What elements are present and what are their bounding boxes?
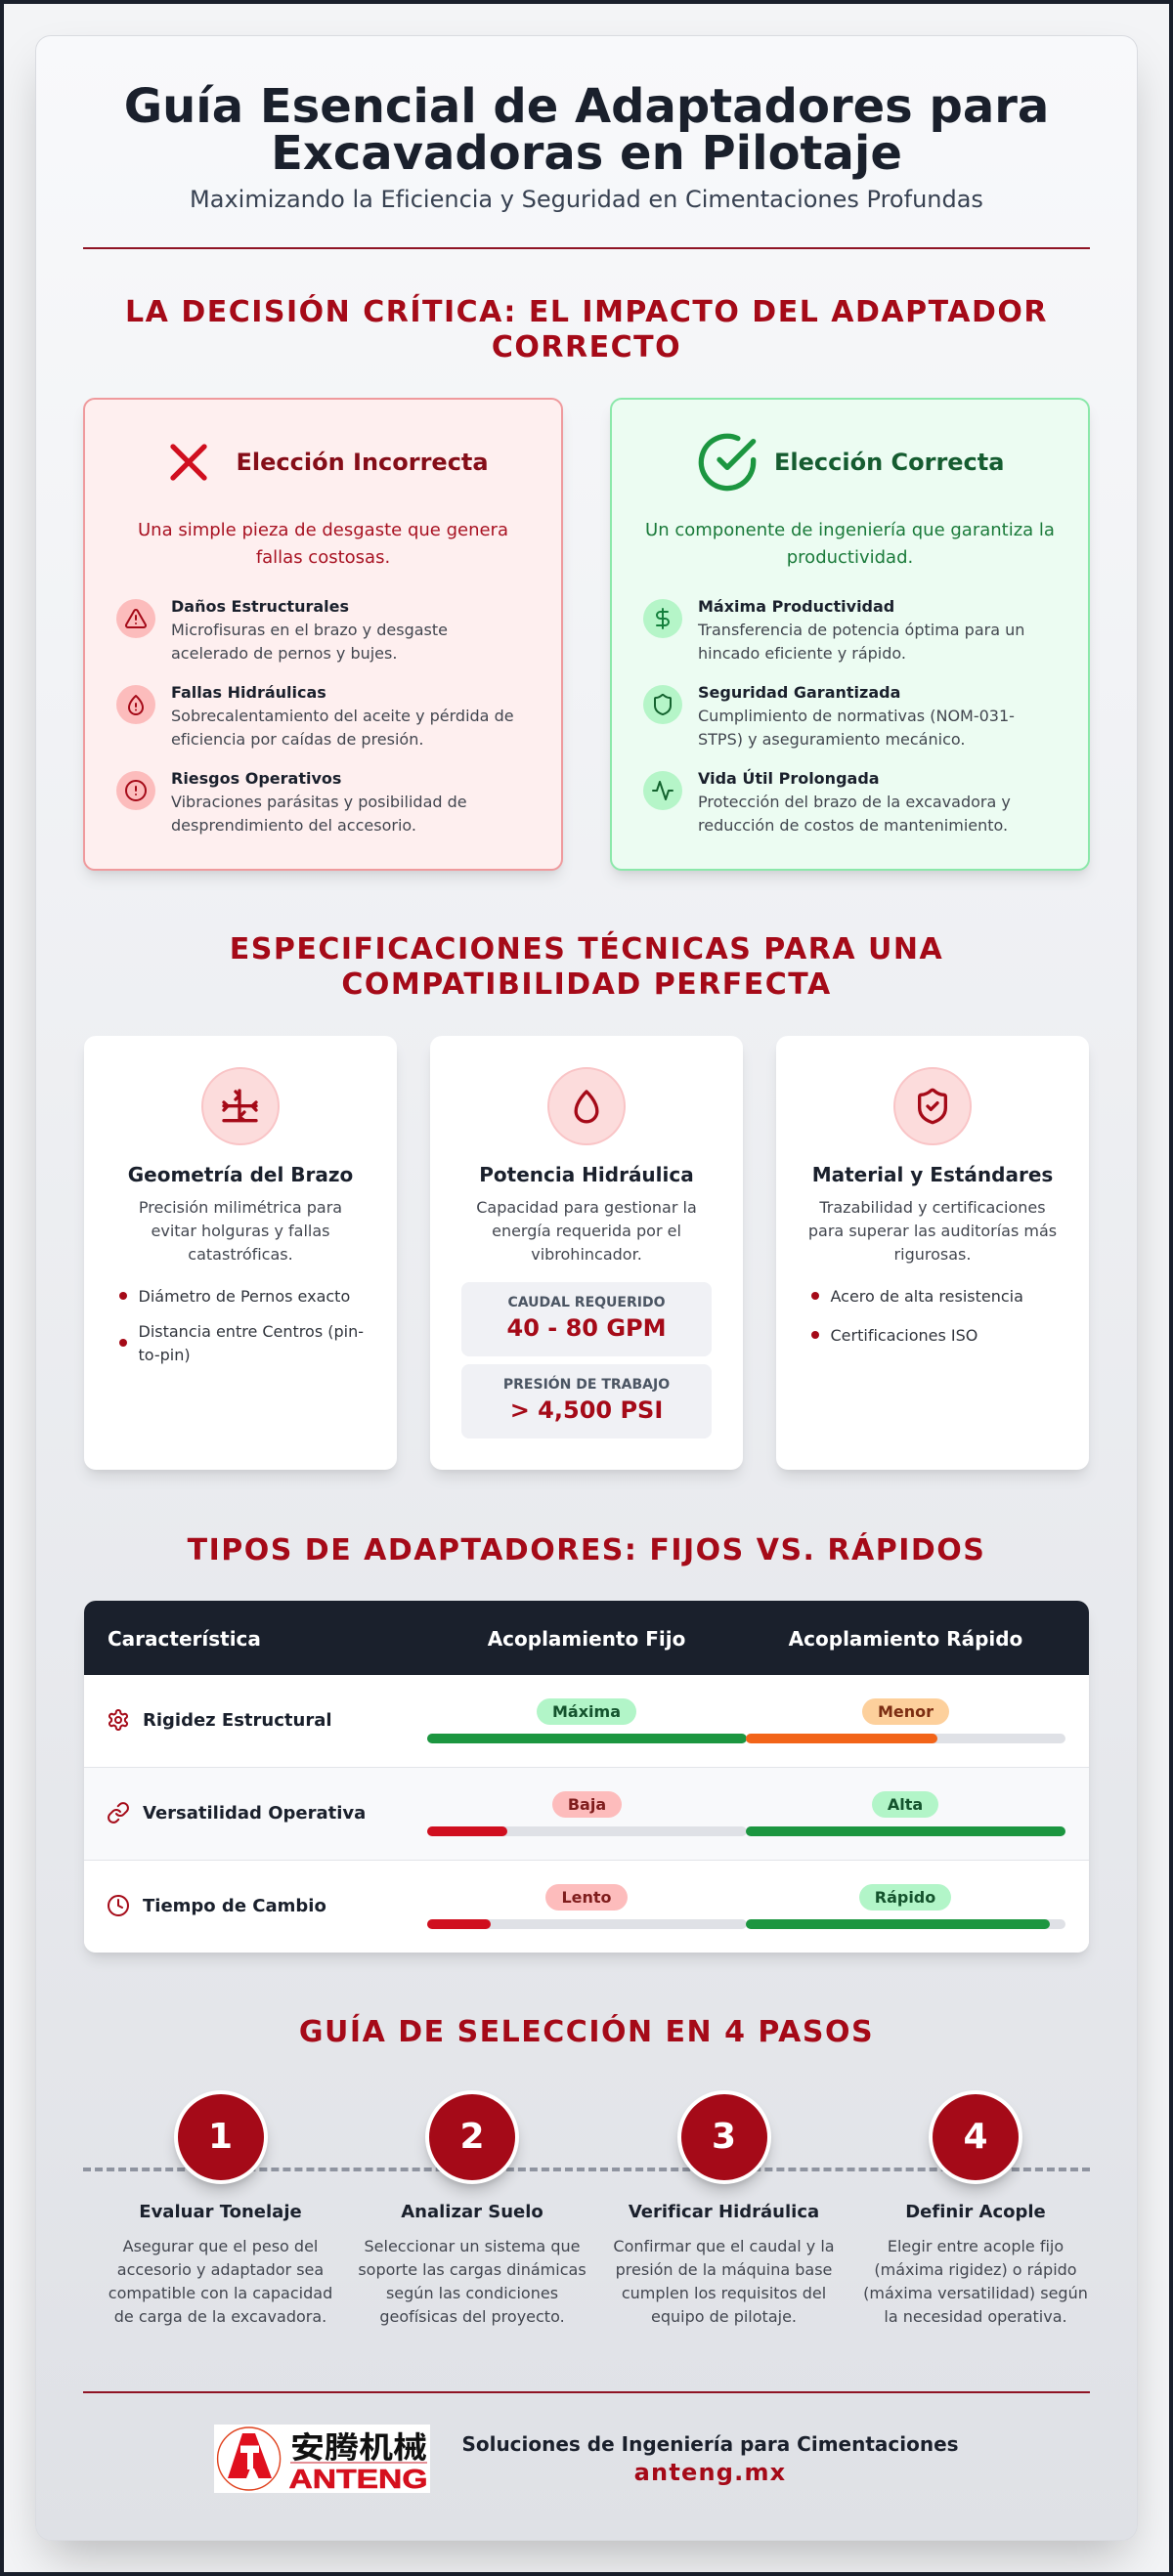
step number: 3	[712, 2117, 736, 2157]
step text	[613, 2237, 835, 2326]
column: acoplamiento fijo: Acoplamiento Fijo	[488, 1627, 685, 1651]
logo: anteng	[214, 2425, 430, 2493]
bullet	[811, 1331, 819, 1339]
step title: Analizar Suelo	[401, 2202, 543, 2222]
icon: check circle	[698, 434, 757, 491]
row: tiempo de cambio	[84, 1861, 1089, 1953]
bar: rápido 60%	[746, 1734, 1065, 1743]
step text: presión de la máquina base	[616, 2260, 832, 2279]
badge: baja	[552, 1791, 622, 1818]
step number	[676, 2090, 770, 2184]
bullet	[119, 1339, 127, 1347]
badge: alta	[872, 1791, 938, 1818]
panel: elección incorrecta	[83, 398, 563, 871]
step 3	[613, 2090, 835, 2326]
step text: (máxima rigidez) o rápido	[874, 2260, 1077, 2279]
bullet text	[139, 1322, 364, 1364]
badge: baja: Baja	[568, 1795, 606, 1814]
panel heading: Elección Correcta	[774, 449, 1004, 476]
stat: caudal: 40 - 80 GPM	[506, 1314, 667, 1342]
card title: Potencia Hidráulica	[479, 1163, 694, 1186]
card text: vibrohincador.	[531, 1245, 642, 1264]
item text: desprendimiento del accesorio.	[171, 816, 416, 835]
card text: Capacidad para gestionar la	[476, 1198, 697, 1217]
item text	[698, 768, 1011, 835]
step text	[109, 2237, 332, 2326]
step text: Elegir entre acople fijo	[888, 2237, 1064, 2255]
bullet text: Diámetro de Pernos exacto	[139, 1287, 350, 1306]
card text: Precisión milimétrica para	[139, 1198, 342, 1217]
column: característica: Característica	[108, 1627, 261, 1651]
step text: cumplen los requisitos del	[622, 2284, 826, 2302]
stat: caudal: CAUDAL REQUERIDO	[508, 1295, 665, 1310]
row label: Rigidez Estructural	[143, 1710, 332, 1731]
step number	[174, 2090, 268, 2184]
step text: compatible con la capacidad	[109, 2284, 332, 2302]
card text: energía requerida por el	[492, 1222, 681, 1240]
item text	[698, 597, 1024, 663]
item text: Sobrecalentamiento del aceite y pérdida de	[171, 707, 514, 725]
lead text: fallas costosas.	[256, 547, 390, 568]
item text: hincado eficiente y rápido.	[698, 644, 906, 663]
step text: Asegurar que el peso del	[123, 2237, 318, 2255]
step text: de carga de la excavadora.	[114, 2307, 326, 2326]
step text	[863, 2237, 1088, 2326]
step number	[425, 2090, 519, 2184]
badge: menor: Menor	[878, 1702, 934, 1721]
heading: especificaciones: ESPECIFICACIONES TÉCNICAS PARA UNA	[230, 932, 943, 966]
step text: (máxima versatilidad) según	[863, 2284, 1088, 2302]
bar: rápido 95%	[746, 1919, 1065, 1929]
step 4	[863, 2090, 1088, 2326]
item text	[698, 683, 1015, 749]
item text: eficiencia por caídas de presión.	[171, 730, 423, 749]
badge: alta: Alta	[888, 1795, 923, 1814]
heading: especificaciones	[230, 930, 943, 1002]
card text	[808, 1198, 1057, 1264]
step text: según las condiciones	[386, 2284, 558, 2302]
step number: 1	[208, 2117, 233, 2157]
card text: catastróficas.	[188, 1245, 293, 1264]
bullet text: to-pin)	[139, 1346, 191, 1364]
row: versatilidad operativa	[84, 1768, 1089, 1861]
step text: la necesidad operativa.	[884, 2307, 1067, 2326]
footer tagline: Soluciones de Ingeniería para Cimentaciones	[461, 2432, 959, 2456]
step title: Evaluar Tonelaje	[139, 2202, 302, 2222]
icon: arm geometry	[201, 1067, 280, 1145]
step text: accesorio y adaptador sea	[117, 2260, 324, 2279]
icon: shield	[643, 685, 682, 724]
panel heading: Elección Incorrecta	[237, 449, 489, 476]
comparison table	[84, 1601, 1089, 1953]
stat: presión: PRESIÓN DE TRABAJO	[503, 1377, 670, 1393]
item text: Vida Útil Prolongada	[698, 769, 880, 788]
step 2	[358, 2090, 586, 2326]
step number: 4	[963, 2117, 988, 2157]
badge: menor	[862, 1698, 949, 1725]
bar: rápido 100%	[746, 1826, 1065, 1836]
panel: elección correcta	[610, 398, 1090, 871]
stat: caudal	[461, 1282, 712, 1356]
bullet	[119, 1292, 127, 1300]
item text: acelerado de pernos y bujes.	[171, 644, 397, 663]
bullet	[811, 1292, 819, 1300]
step text: geofísicas del proyecto.	[379, 2307, 565, 2326]
title	[124, 79, 1049, 181]
column: acoplamiento rápido: Acoplamiento Rápido	[789, 1627, 1022, 1651]
icon: x	[170, 444, 207, 481]
item text: Riesgos Operativos	[171, 769, 341, 788]
stat: presión: > 4,500 PSI	[510, 1396, 663, 1424]
item: máxima productividad	[643, 597, 1024, 663]
step text: equipo de pilotaje.	[651, 2307, 797, 2326]
card text	[139, 1198, 342, 1264]
icon: warning	[116, 599, 155, 638]
lead text: productividad.	[787, 547, 913, 568]
card text: para superar las auditorías más	[808, 1222, 1057, 1240]
step text: soporte las cargas dinámicas	[358, 2260, 586, 2279]
item text: Vibraciones parásitas y posibilidad de	[171, 793, 467, 811]
step 1	[109, 2090, 332, 2326]
bar: fijo 25%	[427, 1826, 747, 1836]
lead text: Un componente de ingeniería que garantiza la	[645, 520, 1055, 540]
title: Guía Esencial de Adaptadores para	[124, 79, 1049, 134]
step number: 2	[459, 2117, 485, 2157]
step text: Confirmar que el caudal y la	[613, 2237, 835, 2255]
card text: Trazabilidad y certificaciones	[819, 1198, 1046, 1217]
item text: Fallas Hidráulicas	[171, 683, 326, 702]
item: daños estructurales	[116, 597, 448, 663]
badge: lento	[545, 1884, 628, 1911]
row label: Tiempo de Cambio	[143, 1896, 326, 1916]
row label: Versatilidad Operativa	[143, 1803, 366, 1824]
badge: rápido: Rápido	[875, 1888, 935, 1907]
heading: decisión crítica: CORRECTO	[492, 330, 681, 365]
item text: Daños Estructurales	[171, 597, 349, 616]
subtitle: Maximizando la Eficiencia y Seguridad en Cimentaciones Profundas	[190, 186, 983, 213]
panel: geometría del brazo	[84, 1036, 397, 1470]
heading: tipos de adaptadores: TIPOS DE ADAPTADORES: FIJOS VS. RÁPIDOS	[188, 1533, 985, 1567]
badge: rápido	[859, 1884, 951, 1911]
icon: shield check	[893, 1067, 972, 1145]
item text: Microfisuras en el brazo y desgaste	[171, 621, 448, 639]
item text	[171, 597, 448, 663]
item text: STPS) y aseguramiento mecánico.	[698, 730, 965, 749]
step title: Definir Acople	[905, 2202, 1046, 2222]
card text: rigurosas.	[894, 1245, 971, 1264]
heading: decisión crítica: LA DECISIÓN CRÍTICA: EL IMPACTO DEL ADAPTADOR	[125, 295, 1048, 329]
icon: drop	[547, 1067, 626, 1145]
card text	[476, 1198, 697, 1264]
item text: reducción de costos de mantenimiento.	[698, 816, 1008, 835]
row: rigidez estructural	[84, 1675, 1089, 1768]
card text: evitar holguras y fallas	[151, 1222, 330, 1240]
item text: Protección del brazo de la excavadora y	[698, 793, 1011, 811]
step title: Verificar Hidráulica	[629, 2202, 819, 2222]
card title: Geometría del Brazo	[128, 1163, 353, 1186]
step number	[929, 2090, 1022, 2184]
item: fallas hidráulicas	[116, 683, 514, 749]
step text: Seleccionar un sistema que	[365, 2237, 580, 2255]
item text	[171, 683, 514, 749]
panel: potencia hidráulica	[430, 1036, 743, 1470]
bullet text: Distancia entre Centros (pin-	[139, 1322, 364, 1341]
title: Excavadoras en Pilotaje	[271, 126, 902, 181]
badge: lento: Lento	[561, 1888, 612, 1907]
card title: Material y Estándares	[812, 1163, 1053, 1186]
badge: máxima	[537, 1698, 636, 1725]
bar: fijo 100%	[427, 1734, 747, 1743]
icon: pulse	[643, 771, 682, 810]
item text: Máxima Productividad	[698, 597, 894, 616]
lead text	[138, 520, 508, 568]
lead text: Una simple pieza de desgaste que genera	[138, 520, 508, 540]
item: riesgos operativos	[116, 769, 467, 835]
icon: oil drop alert	[116, 685, 155, 724]
heading: especificaciones: COMPATIBILIDAD PERFECTA	[341, 967, 832, 1002]
item text: Cumplimiento de normativas (NOM-031-	[698, 707, 1015, 725]
bar: fijo 20%	[427, 1919, 747, 1929]
icon: dollar	[643, 599, 682, 638]
heading: decisión crítica	[125, 293, 1048, 365]
icon: alert circle	[116, 771, 155, 810]
item text: Seguridad Garantizada	[698, 683, 900, 702]
footer url: anteng.mx	[634, 2459, 786, 2486]
bullet text: Acero de alta resistencia	[831, 1287, 1023, 1306]
bullet text: Certificaciones ISO	[831, 1326, 978, 1345]
table header	[84, 1601, 1089, 1675]
item text: Transferencia de potencia óptima para un	[698, 621, 1024, 639]
badge: máxima: Máxima	[552, 1702, 621, 1721]
panel: material y estándares	[776, 1036, 1089, 1470]
item: seguridad garantizada	[643, 683, 1015, 749]
lead text	[645, 520, 1055, 568]
item: vida útil	[643, 768, 1011, 835]
step text	[358, 2237, 586, 2326]
heading: guía de selección: GUÍA DE SELECCIÓN EN 4 PASOS	[299, 2015, 874, 2049]
item text	[171, 769, 467, 835]
stat: presión	[461, 1364, 712, 1438]
